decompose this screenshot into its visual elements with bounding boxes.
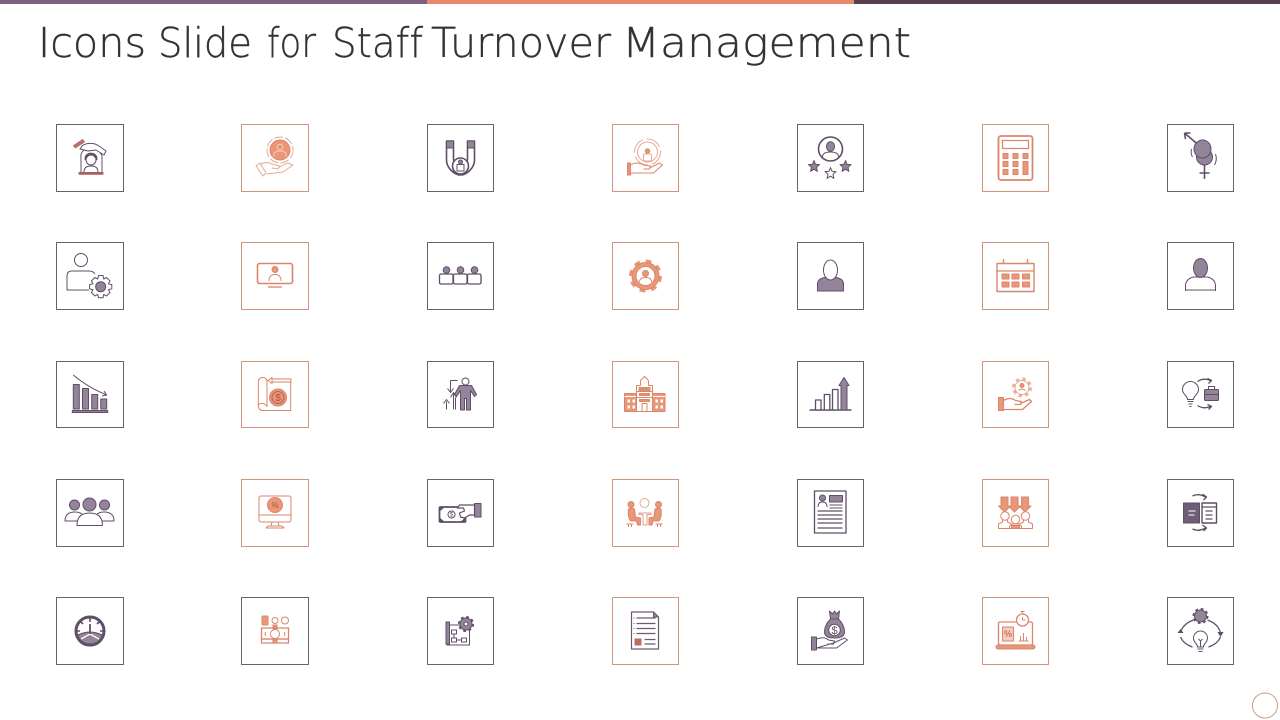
icon: calendar	[982, 242, 1048, 310]
icon: hand holding banknote: $	[450, 512, 454, 518]
icon: office building	[612, 362, 678, 428]
title: Turnover	[431, 19, 611, 67]
icon: gender symbols	[1168, 124, 1234, 192]
icon: employee cycle in hand	[612, 124, 678, 192]
icon: monitor with percent	[242, 480, 308, 546]
icon: gear over hand	[982, 362, 1048, 428]
icon: employee silhouette with filled head	[1168, 242, 1234, 310]
icon: three seated team members	[428, 242, 494, 310]
title	[38, 19, 911, 67]
icon: group of three people	[56, 480, 124, 546]
title: Management	[622, 19, 911, 67]
icon: scroll with coin: $	[275, 393, 281, 404]
title: for	[267, 19, 316, 67]
icon: hand protecting employee	[56, 124, 124, 192]
icon: laptop with timer and percent	[982, 598, 1048, 664]
icon: downsizing arrows over people	[982, 480, 1048, 546]
icon: calculator	[982, 124, 1048, 192]
icon: document exchange	[1168, 480, 1234, 546]
title: Slide	[158, 19, 252, 67]
icon: person with up and down arrows	[428, 362, 494, 428]
icon: process flow with gear	[428, 598, 494, 664]
icon: employee in gear	[612, 242, 678, 310]
icon: idea to briefcase exchange	[1168, 362, 1234, 428]
icon: checklist document	[612, 598, 678, 664]
icon: laptop with timer and percent: %	[1004, 629, 1012, 639]
icon: two people meeting at table	[612, 480, 678, 546]
title: Staff	[332, 19, 424, 67]
icon: employee rating stars	[798, 124, 864, 192]
icon: employee with gear	[56, 242, 124, 310]
icon: money bag in hand	[798, 598, 864, 664]
icon: rising bar chart with arrow	[798, 362, 864, 428]
icon: declining bar chart	[56, 362, 124, 428]
icon: video call monitor	[242, 242, 308, 310]
icon: gear and idea cycle	[1168, 598, 1234, 664]
icon: magnet attracting employee	[428, 124, 494, 192]
icon: resume document	[798, 480, 864, 546]
icon: money bag in hand: $	[831, 625, 838, 637]
icon: scroll with coin	[242, 362, 308, 428]
icon: speedometer gauge	[56, 598, 124, 664]
icon: hand holding banknote	[428, 480, 494, 546]
icon: employee silhouette with filled body	[798, 242, 864, 310]
icon: globe people in hand	[242, 124, 308, 192]
page number circle	[1252, 693, 1278, 718]
icon: money and coins	[242, 598, 308, 664]
icon: monitor with percent: %	[271, 501, 279, 510]
title: Icons	[38, 19, 146, 67]
top colour bar	[0, 0, 1280, 4]
